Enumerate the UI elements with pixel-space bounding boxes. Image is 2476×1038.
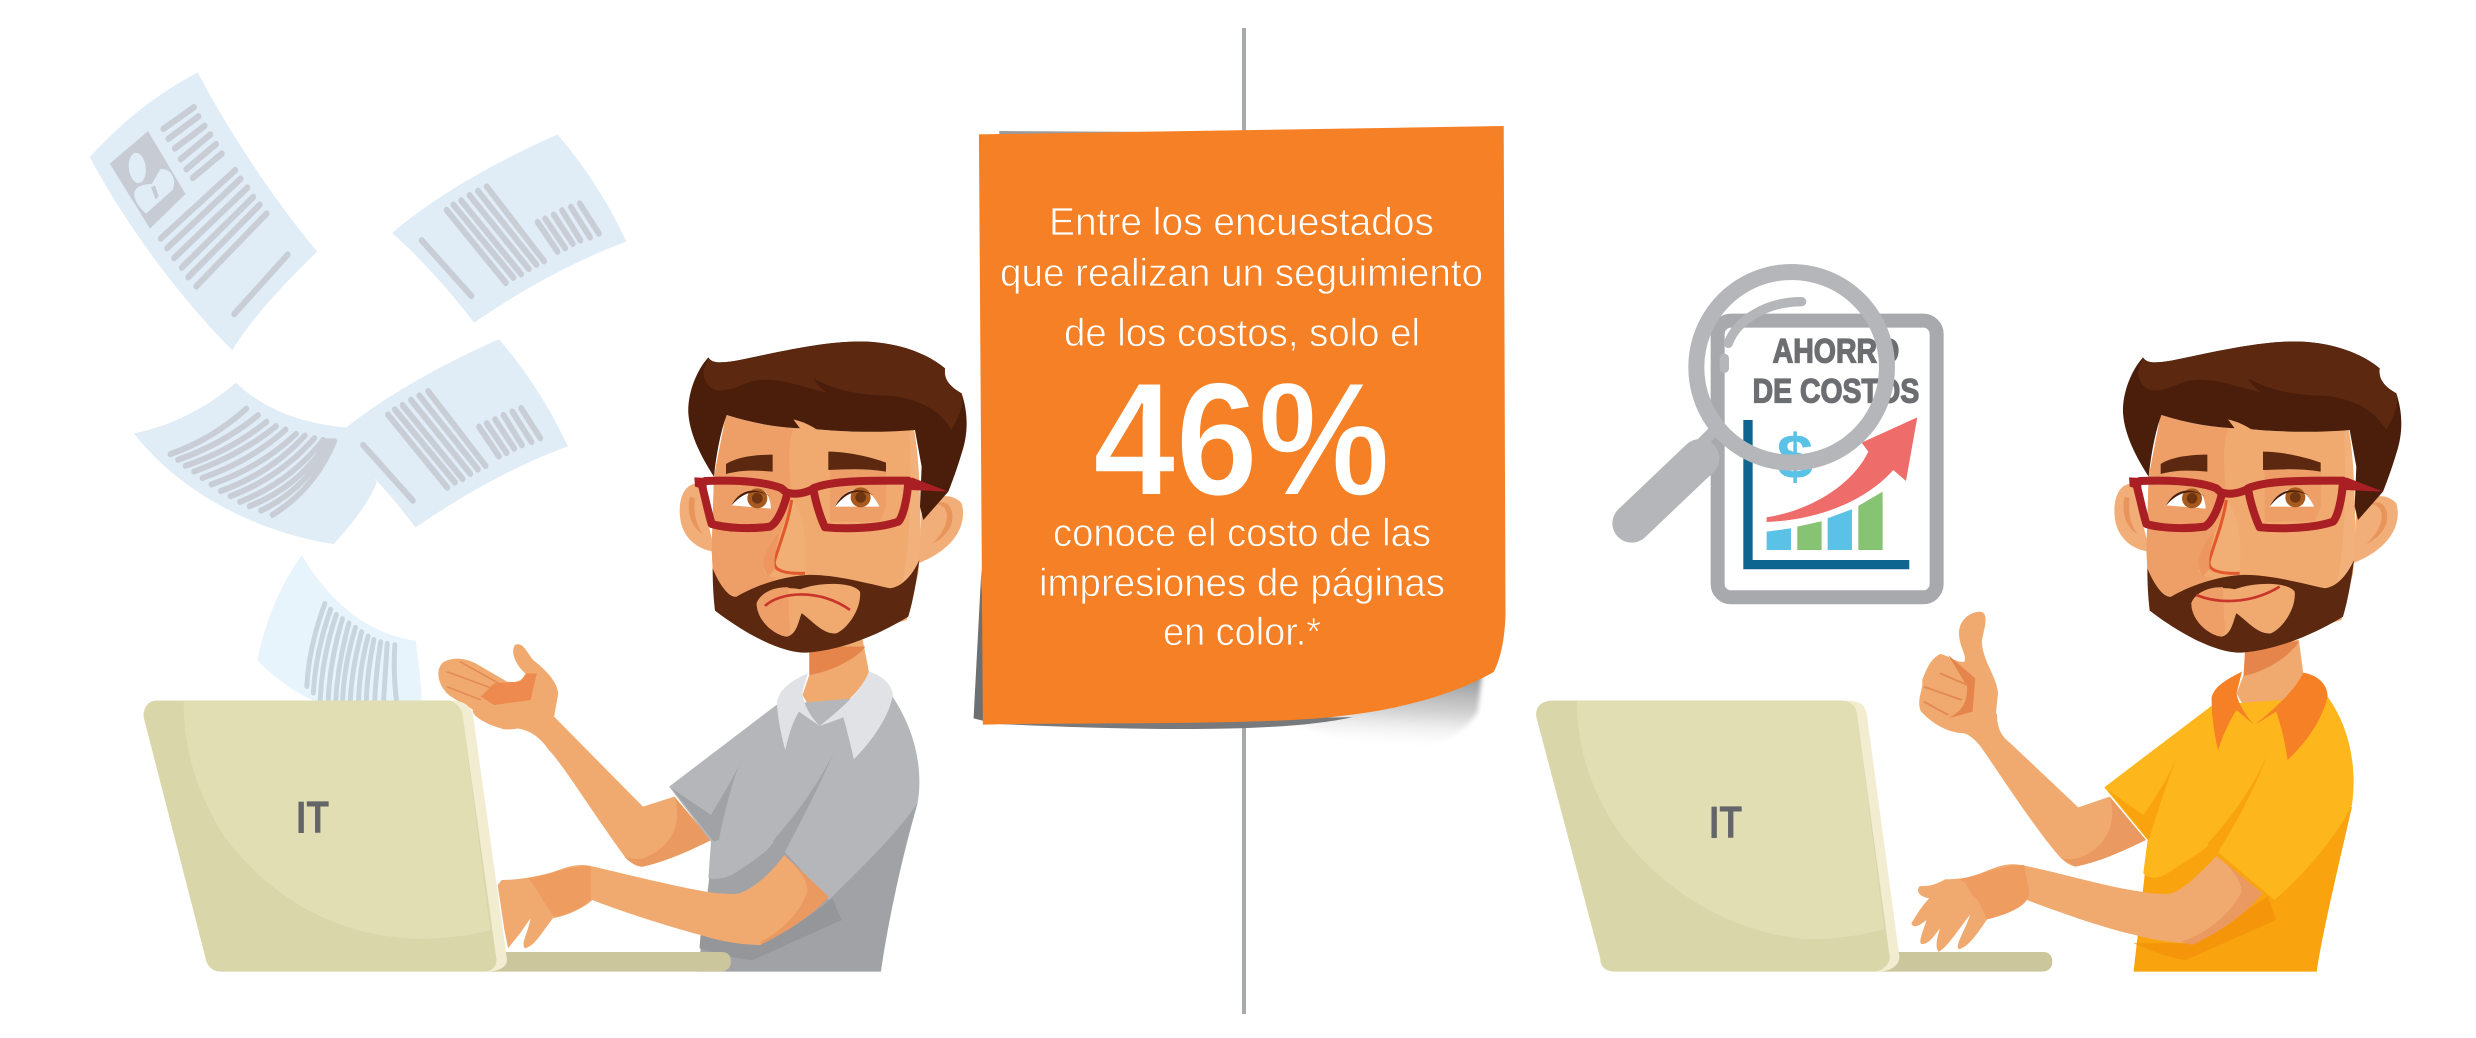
- report card: [1718, 321, 1937, 597]
- keyboard base: [1878, 952, 2052, 972]
- report title: [1753, 333, 1919, 411]
- icon: cost savings report with magnifier: [1632, 272, 1937, 597]
- collar: [2212, 672, 2328, 760]
- laptop lid: [144, 701, 507, 972]
- laptop lid: [1536, 701, 1899, 972]
- open hand: [438, 644, 558, 729]
- left laptop: [144, 701, 731, 972]
- note text: que realizan un seguimiento: [1000, 252, 1483, 295]
- collar: [777, 672, 893, 759]
- flying papers: [90, 73, 626, 704]
- right character head: [2114, 342, 2401, 653]
- paper: middle right document: [334, 339, 568, 527]
- note text: Entre los encuestados: [1049, 201, 1434, 244]
- center divider line: [1242, 28, 1246, 1014]
- shirt upper panel: [669, 695, 919, 900]
- report title: AHORRO: [1773, 333, 1899, 371]
- laptop label IT: IT: [1709, 797, 1742, 848]
- note text: 46%: [1093, 349, 1390, 530]
- right laptop: [1536, 701, 2052, 972]
- shirt base: [698, 803, 918, 972]
- note text: [1000, 201, 1483, 654]
- note shadow: [974, 126, 1505, 748]
- magnifying glass: [1632, 272, 1887, 523]
- bars: [1767, 492, 1883, 550]
- note text: impresiones de páginas: [1039, 562, 1445, 605]
- shirt base: [2134, 807, 2352, 972]
- neck: [2237, 640, 2303, 725]
- raised arm: [1964, 713, 2146, 867]
- growth arrow: [1767, 417, 1917, 522]
- note text: de los costos, solo el: [1064, 312, 1420, 355]
- note sheet: [979, 126, 1505, 725]
- neck: [803, 640, 869, 725]
- paper: document with photo: [90, 73, 317, 350]
- lower arm on laptop: [498, 855, 842, 960]
- lower arm and hand: [1911, 856, 2276, 960]
- right character body: yellow shirt: [1911, 612, 2354, 972]
- dollar sign: $: [1777, 422, 1813, 492]
- paper: top right document: [392, 135, 626, 323]
- raised arm: [517, 717, 711, 867]
- paper: middle left curved document: [134, 383, 377, 544]
- sad mouth: [765, 594, 850, 610]
- orange note callout: [974, 126, 1505, 748]
- shirt upper panel: [2104, 697, 2354, 900]
- chart axes: [1743, 420, 1909, 569]
- left character body: grey shirt: [438, 640, 919, 972]
- left character head: [680, 342, 967, 653]
- keyboard base: [486, 952, 731, 972]
- note text: en color.*: [1163, 611, 1321, 654]
- note text: conoce el costo de las: [1053, 512, 1431, 555]
- report title: DE COSTOS: [1753, 373, 1919, 411]
- thumbs-up hand: [1919, 612, 1998, 733]
- smiling mouth: [2196, 587, 2280, 601]
- paper: coming out of laptop: [257, 555, 422, 704]
- laptop label IT: IT: [296, 792, 329, 843]
